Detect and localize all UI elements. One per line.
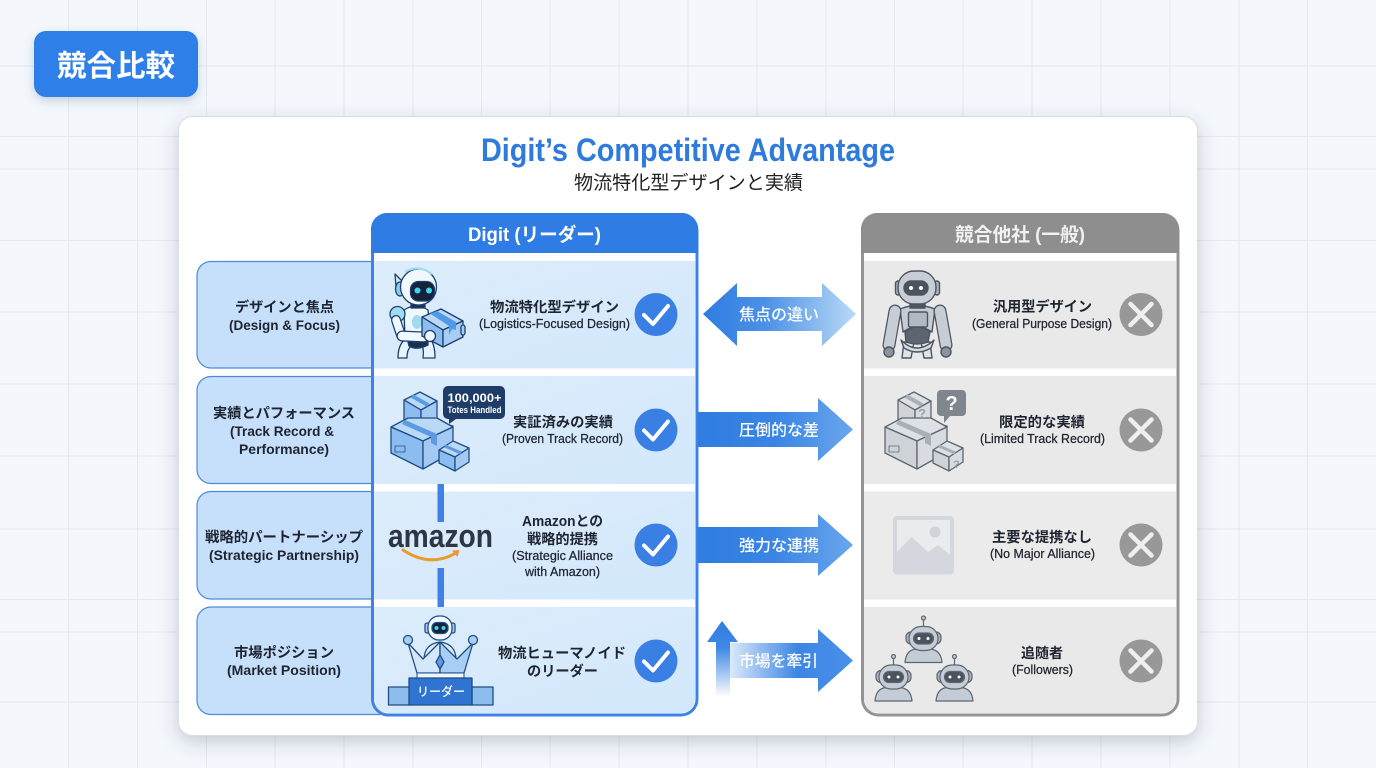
icon: image placeholder — [893, 516, 954, 574]
column header — [371, 213, 698, 253]
panel: Digit column — [371, 213, 698, 715]
row text: general purpose design: 汎用型デザイン — [993, 298, 1092, 316]
icon: check — [634, 408, 678, 452]
icon: robot with crown on podium — [388, 616, 493, 705]
callout: question mark: ? — [946, 393, 958, 415]
logo: amazon: amazon — [388, 518, 493, 554]
label: strategic partnership — [197, 492, 380, 599]
icon: cross — [1120, 640, 1162, 682]
arrow: strong alliance: 強力な連携 — [739, 537, 819, 555]
icon: check — [634, 524, 678, 566]
row text: proven track record: (Proven Track Record) — [502, 432, 623, 446]
row text: followers — [1012, 644, 1073, 677]
column header — [861, 213, 1179, 253]
callout: question mark — [937, 390, 966, 423]
label: market position — [197, 607, 380, 714]
label: design and focus: デザインと焦点 — [235, 298, 334, 316]
icon: three follower robots — [875, 616, 973, 701]
arrow: difference in focus: 焦点の違い — [739, 306, 819, 324]
panel: row labels — [197, 262, 380, 714]
label: track record and performance: 実績とパフォーマンス — [213, 404, 355, 422]
icon: generic robot — [884, 271, 951, 358]
label: track record and performance — [197, 376, 380, 484]
row text: proven track record: 実証済みの実績 — [513, 413, 613, 431]
label: strategic partnership: 戦略的パートナーシップ — [205, 528, 364, 546]
icon: check — [634, 640, 678, 682]
row text: strategic alliance with Amazon: 戦略的提携 — [527, 530, 598, 548]
row text: no major alliance: 主要な提携なし — [992, 528, 1092, 546]
row text: followers: 追随者 — [1021, 644, 1063, 662]
icon: check — [634, 293, 678, 336]
icon: robot carrying box — [390, 268, 465, 358]
arrow: leading the market: 市場を牽引 — [739, 652, 818, 670]
icon: grey boxes with question marks — [885, 392, 963, 471]
subtitle: 物流特化型デザインと実績 — [574, 172, 803, 194]
row text: strategic alliance with Amazon: with Amazon) — [524, 565, 600, 579]
callout: 100,000+ totes handled: 100,000+ — [448, 391, 502, 405]
row text: logistics-focused design: (Logistics-Focused Design) — [479, 317, 630, 331]
row text: no major alliance — [990, 528, 1095, 561]
panel: competitors column — [861, 213, 1179, 715]
callout: 100,000+ totes handled — [443, 386, 505, 424]
row text: strategic alliance with Amazon — [512, 513, 613, 579]
icon: robot with crown on podium: リーダー — [417, 684, 465, 699]
row text: limited track record: (Limited Track Record) — [980, 432, 1105, 446]
arrow: overwhelming difference — [698, 398, 853, 461]
connector bars — [438, 484, 444, 607]
row text: proven track record — [502, 413, 623, 446]
label: market position: 市場ポジション — [234, 644, 334, 662]
icon: cross — [1120, 293, 1162, 336]
row text: logistics-focused design — [479, 298, 630, 331]
row text: general purpose design: (General Purpose Design) — [972, 317, 1112, 331]
label: design and focus — [197, 262, 380, 368]
arrow: leading the market — [707, 621, 853, 696]
row text: followers: (Followers) — [1012, 663, 1073, 677]
row text: no major alliance: (No Major Alliance) — [990, 547, 1095, 561]
icon: cross — [1120, 408, 1162, 452]
icon: grey boxes with question marks: ? — [953, 459, 960, 471]
row text: logistics humanoid leader — [498, 644, 626, 680]
row text: logistics humanoid leader: のリーダー — [527, 662, 598, 680]
arrow: difference in focus — [703, 283, 856, 346]
title: Digit’s Competitive Advantage — [481, 132, 895, 168]
label: track record and performance: Performance) — [239, 441, 329, 457]
label: track record and performance: (Track Record & — [230, 423, 334, 439]
badge: 競合比較 — [34, 31, 198, 97]
badge: 競合比較: 競合比較 — [57, 50, 175, 83]
row text: strategic alliance with Amazon: (Strategic Alliance — [512, 549, 613, 563]
row text: logistics humanoid leader: 物流ヒューマノイド — [498, 644, 626, 662]
main panel — [178, 116, 1198, 736]
row text: limited track record: 限定的な実績 — [999, 413, 1085, 431]
arrow: overwhelming difference: 圧倒的な差 — [739, 422, 819, 440]
row text: general purpose design — [972, 298, 1112, 331]
icon: grey boxes with question marks: ? — [918, 406, 926, 421]
icon: stacked boxes with badge — [391, 392, 469, 471]
label: design and focus: (Design & Focus) — [229, 317, 340, 333]
callout: 100,000+ totes handled: Totes Handled — [448, 405, 502, 415]
icon: cross — [1120, 524, 1162, 566]
row text: logistics-focused design: 物流特化型デザイン — [490, 298, 619, 316]
column header: 競合他社 (一般) — [955, 224, 1085, 246]
label: strategic partnership: (Strategic Partnership) — [209, 547, 359, 563]
arrow: strong alliance — [698, 514, 853, 576]
row text: limited track record — [980, 413, 1105, 446]
label: market position: (Market Position) — [227, 662, 341, 678]
column header: Digit (リーダー) — [468, 223, 601, 246]
row text: strategic alliance with Amazon: Amazonとの — [522, 513, 603, 530]
